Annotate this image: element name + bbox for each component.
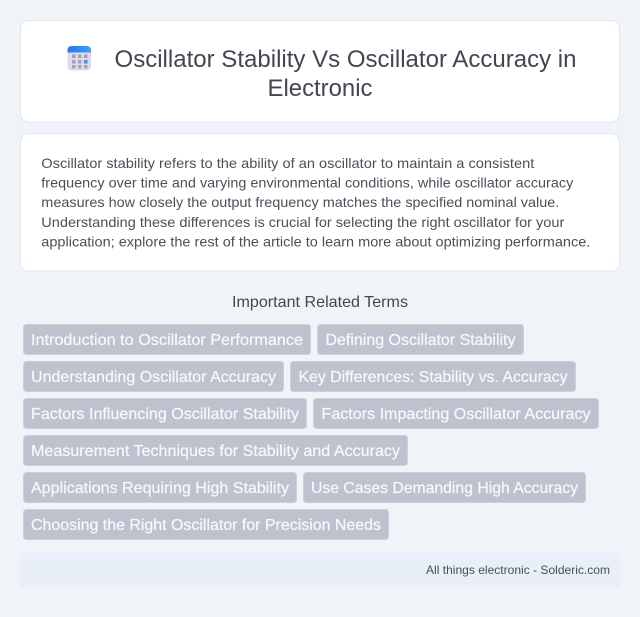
heading: important related terms: Important Related Terms — [232, 294, 408, 311]
tag: defining stability: Defining Oscillator Stability — [326, 332, 516, 349]
panel: header — [20, 20, 620, 122]
tag: defining stability — [318, 324, 524, 354]
header card — [20, 20, 620, 122]
footer — [20, 553, 620, 587]
tag: use cases — [304, 472, 586, 502]
title — [114, 46, 576, 102]
description text — [41, 155, 590, 249]
description card — [20, 134, 620, 271]
tag: use cases: Use Cases Demanding High Accuracy — [311, 480, 578, 497]
description text: Oscillator stability refers to the ability of an oscillator to maintain a consistent — [41, 155, 534, 171]
description text: measures how closely the output frequency matches the specified nominal value. — [41, 194, 559, 210]
tag: factors stability: Factors Influencing Oscillator Stability — [31, 406, 299, 423]
tag: key differences — [290, 362, 576, 392]
tag: factors accuracy — [314, 398, 598, 428]
tag: applications — [24, 472, 296, 502]
icon: calendar — [68, 46, 91, 70]
tag: introduction — [24, 324, 310, 354]
tag: measurement techniques — [24, 436, 408, 466]
title: Electronic — [268, 75, 372, 102]
description text: Understanding these differences is crucial for selecting the right oscillator for your — [41, 214, 565, 230]
panel: related term tags — [24, 324, 598, 540]
title: Oscillator Stability Vs Oscillator Accuracy in — [114, 46, 576, 73]
tag: introduction: Introduction to Oscillator Performance — [31, 332, 303, 349]
tag: applications: Applications Requiring High Stability — [31, 480, 289, 497]
panel: description — [20, 134, 620, 271]
tag: choosing — [24, 510, 388, 540]
tag: key differences: Key Differences: Stability vs. Accuracy — [298, 369, 568, 386]
description text: frequency over time and varying environmental conditions, while oscillator accuracy — [41, 175, 573, 191]
tag: choosing: Choosing the Right Oscillator for Precision Needs — [31, 517, 381, 534]
footer: All things electronic - Solderic.com — [426, 563, 610, 577]
tag: factors stability — [24, 398, 306, 428]
tag: understanding accuracy — [24, 362, 284, 392]
tag: factors accuracy: Factors Impacting Oscillator Accuracy — [322, 406, 590, 423]
tag: measurement techniques: Measurement Techniques for Stability and Accuracy — [31, 443, 400, 460]
tag: understanding accuracy: Understanding Oscillator Accuracy — [31, 369, 276, 386]
description text: application; explore the rest of the article to learn more about optimizing performance. — [41, 233, 590, 249]
